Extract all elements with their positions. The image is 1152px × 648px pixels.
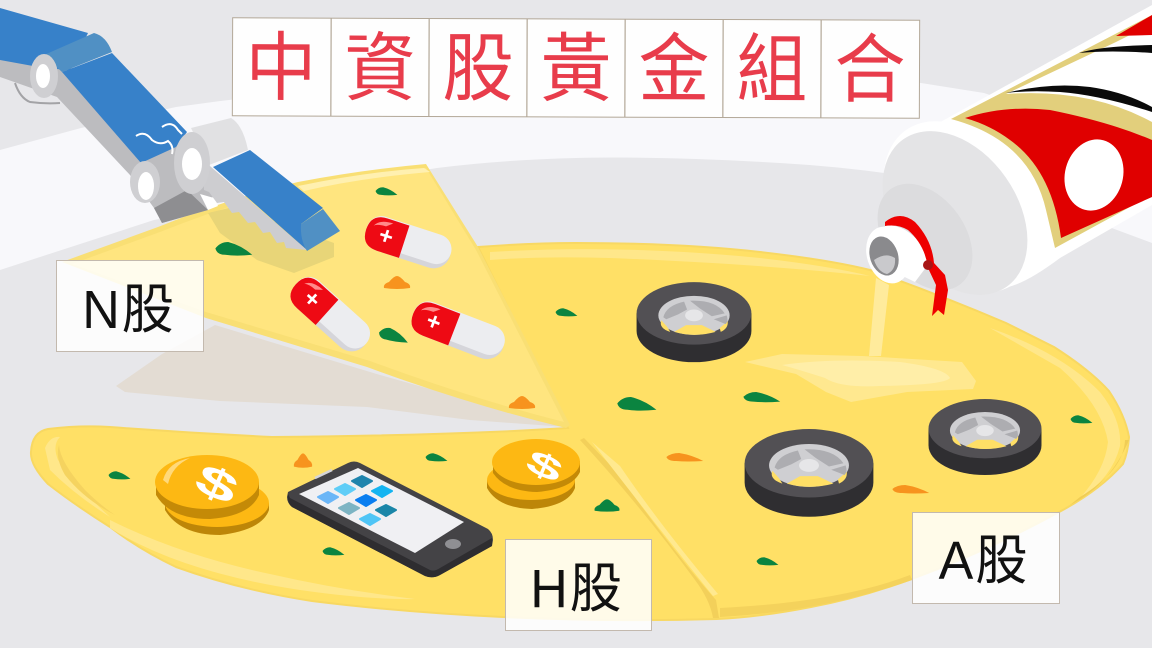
white stripes — [1006, 24, 1152, 122]
cone — [858, 166, 992, 308]
coin stack left: $ — [188, 454, 245, 514]
lower crust of H slice — [110, 520, 415, 599]
gold label — [951, 15, 1152, 248]
label: H shares: H股 — [530, 559, 624, 619]
grey lower arm — [0, 58, 215, 223]
title banner: 合 — [834, 9, 906, 119]
oil pool — [745, 278, 976, 402]
label: N shares — [56, 260, 204, 352]
pizza: lifted N slice — [62, 164, 570, 428]
plate rim — [0, 78, 1152, 270]
label: A shares: A股 — [939, 531, 1029, 591]
white oval — [1057, 133, 1131, 217]
bottom crust shade — [720, 575, 912, 617]
blue upper arm — [0, 8, 88, 70]
red ribbon — [885, 216, 948, 316]
toppings: leaves and carrots — [109, 187, 1092, 565]
robot arm with claw — [0, 8, 340, 251]
title banner: 中 — [245, 7, 317, 117]
title banner: 金 — [638, 9, 710, 118]
blue fore arm — [62, 53, 187, 163]
shoulder — [853, 104, 1057, 322]
sauce tube — [852, 5, 1152, 322]
title banner: 組 — [736, 9, 808, 118]
blue claw plate — [213, 150, 323, 250]
cut between H and A slices — [580, 438, 719, 618]
left crust of H slice — [45, 437, 110, 517]
joint 3 — [174, 132, 210, 194]
pill 3 — [407, 297, 509, 364]
pill 1: + — [375, 221, 397, 251]
coin stack left — [155, 454, 269, 535]
pill 2: + — [298, 285, 326, 314]
label: A shares — [912, 512, 1060, 604]
tires — [637, 282, 1041, 517]
title banner — [232, 7, 920, 119]
shadow of spatula claw — [208, 207, 334, 273]
label: H shares — [506, 540, 652, 630]
title banner: 資 — [344, 8, 416, 117]
light blue arm band — [44, 33, 112, 72]
title banner: 股 — [442, 8, 514, 117]
pill 2 — [284, 271, 376, 358]
cable — [15, 83, 60, 103]
smartphone — [287, 462, 493, 577]
label: N shares: N股 — [82, 280, 176, 340]
toothed claw — [203, 160, 307, 250]
tube body — [900, 5, 1152, 288]
black stripes — [1006, 85, 1152, 112]
red label — [965, 109, 1152, 238]
pill 3: + — [422, 307, 445, 337]
claw head box — [154, 190, 208, 223]
pill 1 — [361, 212, 455, 273]
joint 1 — [30, 54, 58, 98]
pills — [284, 212, 509, 364]
coin stack right: $ — [521, 442, 568, 490]
light blue claw end — [301, 209, 340, 251]
wires — [136, 124, 182, 154]
nozzle — [880, 225, 930, 282]
coin stack right — [487, 439, 580, 509]
shadow of lifted slice — [116, 325, 566, 427]
title banner: 黃 — [540, 8, 612, 118]
pizza: remaining A and H slices — [31, 243, 1129, 620]
joint 2 — [130, 161, 160, 203]
highlights on crust — [490, 249, 870, 276]
top cylinder — [191, 118, 248, 165]
